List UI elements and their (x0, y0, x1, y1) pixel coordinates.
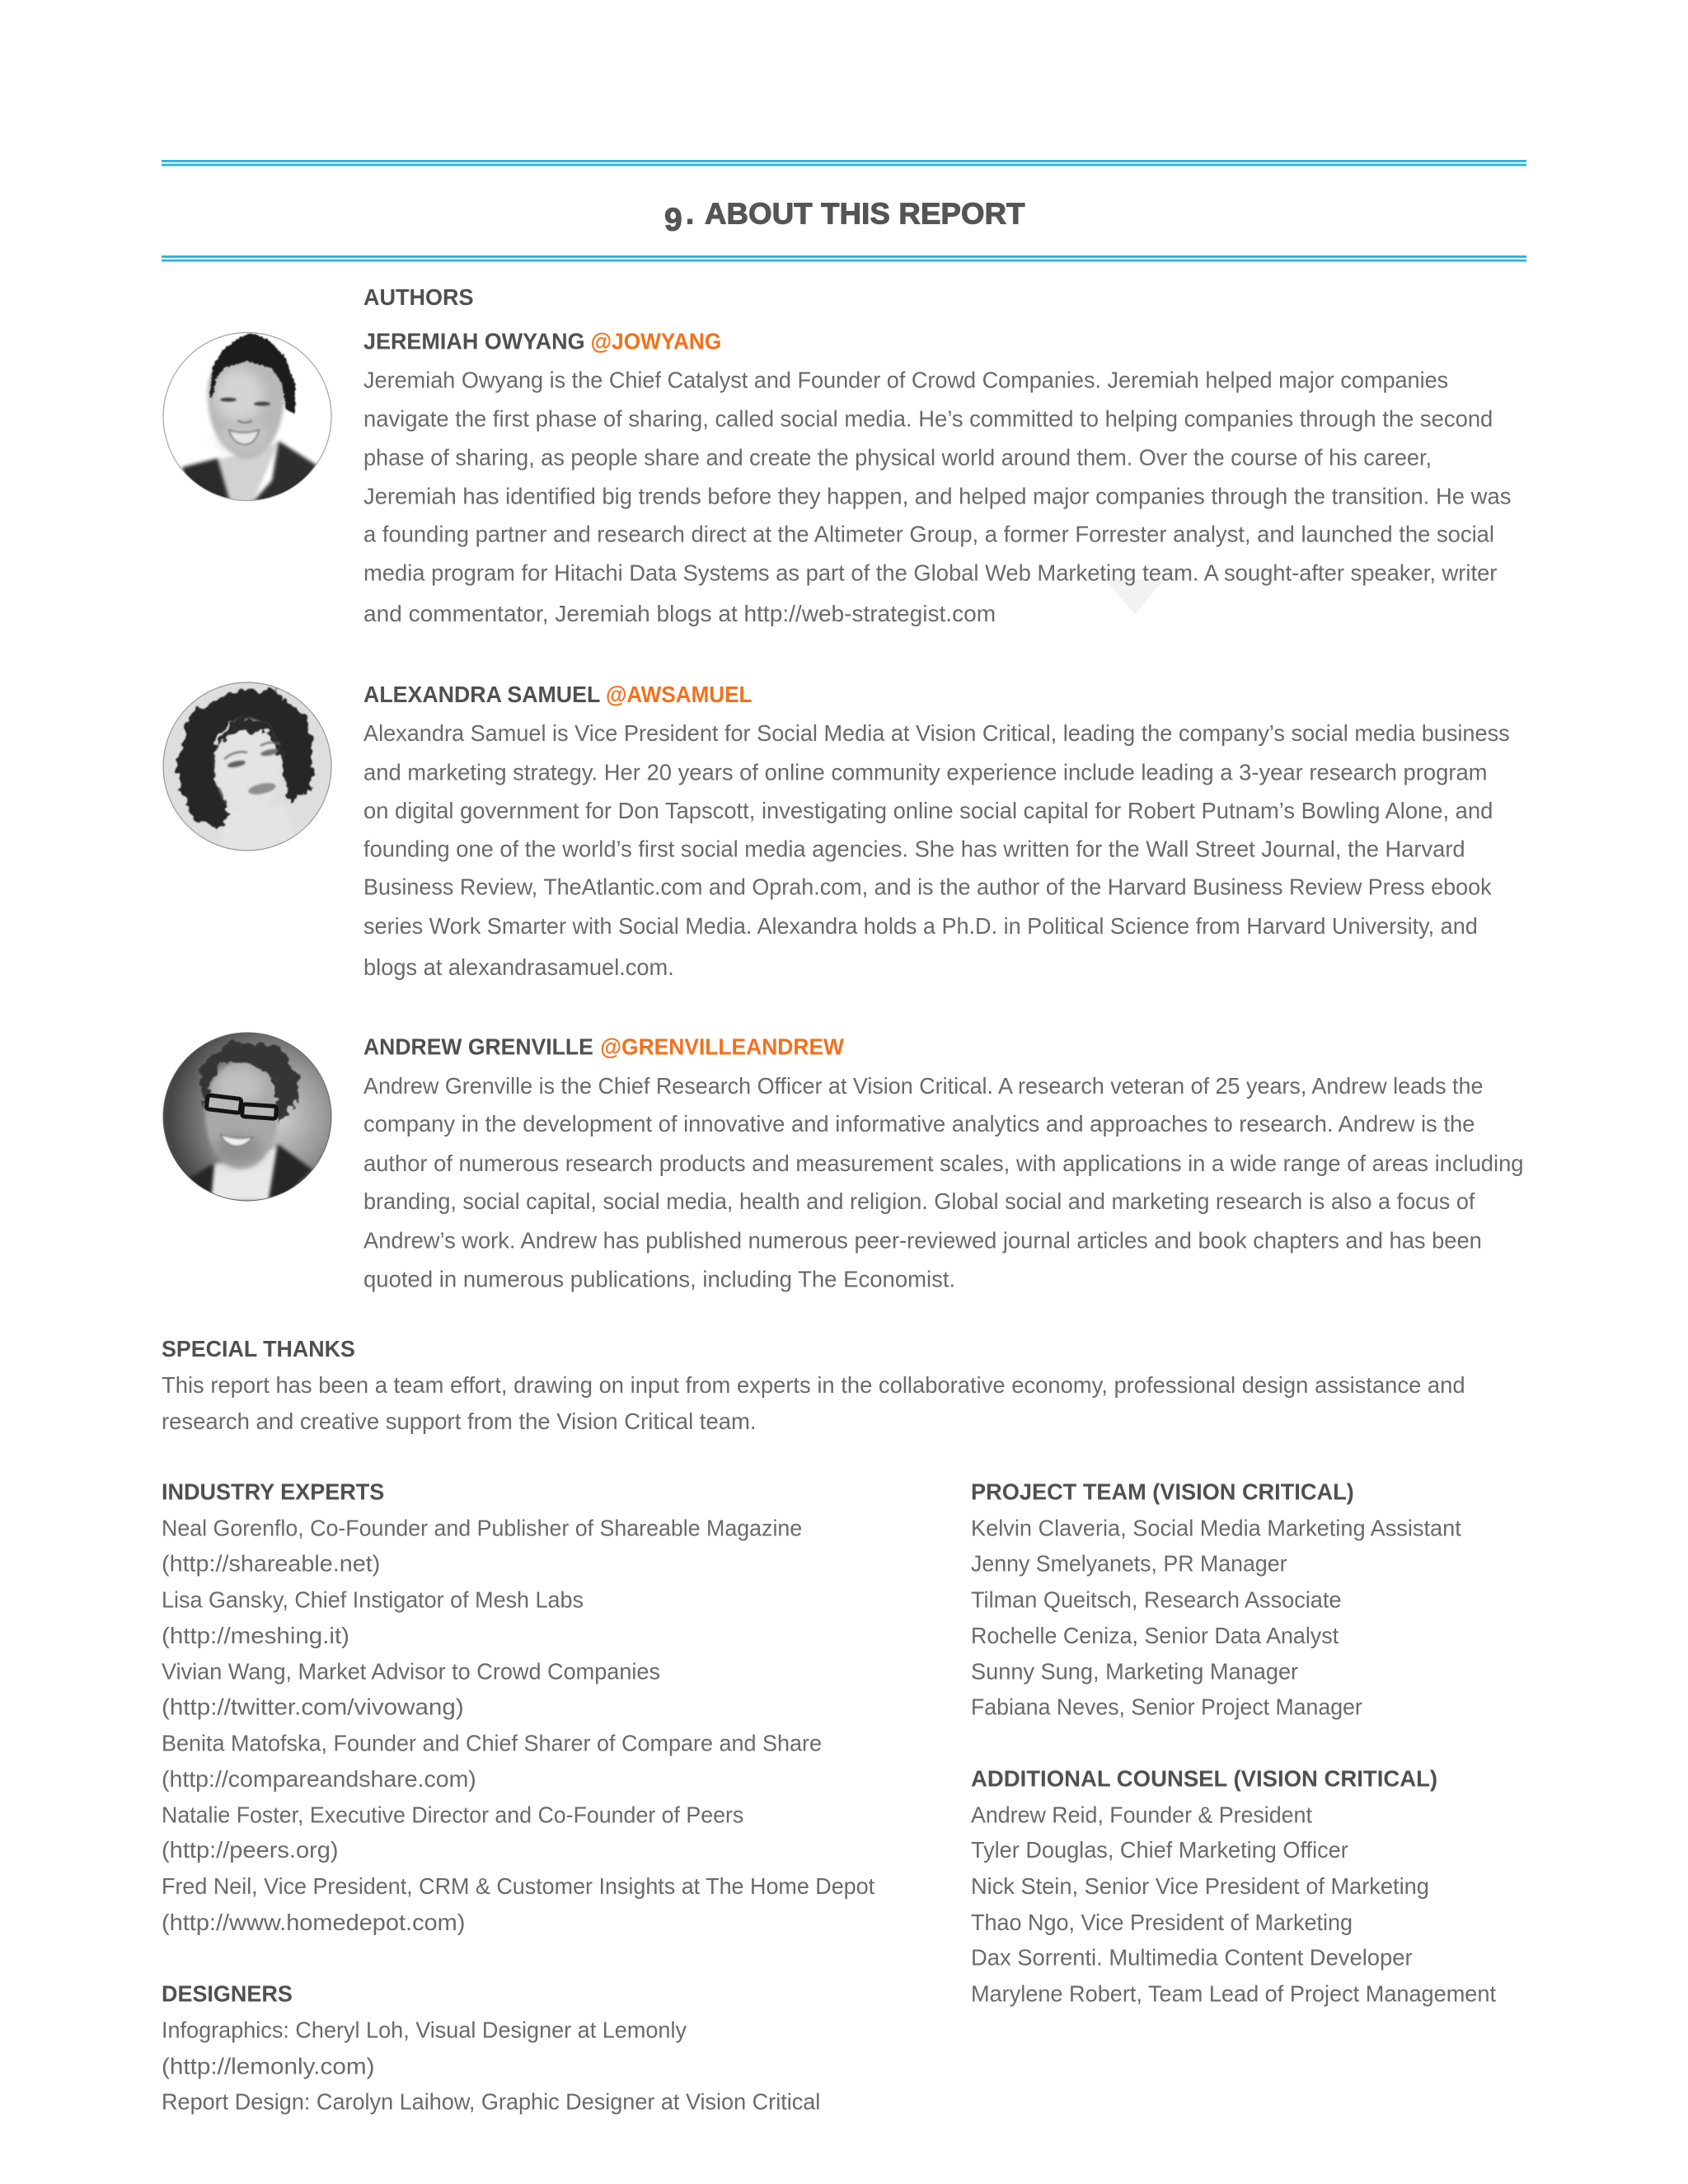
industry experts list: Fred Neil, Vice President, CRM & Customer Insights at The Home Depot (162, 1873, 874, 1899)
biography (363, 1073, 1523, 1292)
name and handle: JEREMIAH OWYANG (363, 328, 585, 354)
portrait: Andrew Grenville (163, 1033, 331, 1201)
industry experts list: Lisa Gansky, Chief Instigator of Mesh Labs (162, 1586, 584, 1612)
designers list (162, 2017, 820, 2114)
designers list: Report Design: Carolyn Laihow, Graphic Designer at Vision Critical (162, 2088, 820, 2114)
project team list: Jenny Smelyanets, PR Manager (971, 1551, 1287, 1576)
special thanks (162, 1336, 1465, 1434)
industry experts list: (http://twitter.com/vivowang) (162, 1694, 464, 1719)
designers list: Infographics: Cheryl Loh, Visual Designer at Lemonly (162, 2017, 687, 2042)
biography: blogs at alexandrasamuel.com. (363, 954, 674, 980)
additional counsel list: Marylene Robert, Team Lead of Project Management (971, 1981, 1496, 2006)
industry experts list: (http://shareable.net) (162, 1551, 380, 1576)
additional counsel list (971, 1802, 1496, 2006)
name and handle (363, 1033, 844, 1060)
biography: founding one of the world’s first social media agencies. She has written for the Wall Street Journal, the Harvard (363, 836, 1465, 862)
portrait: Jeremiah Owyang (163, 333, 331, 504)
industry experts list: Vivian Wang, Market Advisor to Crowd Companies (162, 1658, 660, 1684)
industry experts (162, 1479, 874, 1935)
project team list: Kelvin Claveria, Social Media Marketing Assistant (971, 1515, 1461, 1540)
additional counsel heading: ADDITIONAL COUNSEL (VISION CRITICAL) (971, 1765, 1437, 1792)
name and handle: @AWSAMUEL (606, 682, 752, 707)
project team list (971, 1515, 1461, 1719)
additional counsel list: Thao Ngo, Vice President of Marketing (971, 1910, 1353, 1935)
special thanks text: This report has been a team effort, drawing on input from experts in the collaborative economy, professional design assistance and (162, 1372, 1465, 1398)
industry experts list: Benita Matofska, Founder and Chief Sharer of Compare and Share (162, 1730, 822, 1755)
biography: Andrew Grenville is the Chief Research Officer at Vision Critical. A research veteran of 25 years, Andrew leads the (363, 1073, 1484, 1099)
author: Andrew Grenville (363, 1033, 1523, 1292)
name and handle: @GRENVILLEANDREW (600, 1033, 844, 1060)
biography: quoted in numerous publications, including The Economist. (363, 1267, 955, 1292)
bottom double rule (162, 255, 1526, 262)
portrait: Alexandra Samuel (163, 682, 331, 857)
industry experts list: Natalie Foster, Executive Director and Co-Founder of Peers (162, 1802, 743, 1827)
designers heading: DESIGNERS (162, 1981, 293, 2006)
special thanks heading: SPECIAL THANKS (162, 1336, 355, 1361)
biography: author of numerous research products and measurement scales, with applications in a wide range of areas including (363, 1151, 1523, 1176)
biography: media program for Hitachi Data Systems as part of the Global Web Marketing team. A sought-after speaker, writer (363, 560, 1497, 585)
designers (162, 1981, 820, 2114)
biography: Andrew’s work. Andrew has published numerous peer-reviewed journal articles and book chapters and has been (363, 1227, 1482, 1253)
industry experts list: (http://www.homedepot.com) (162, 1910, 465, 1935)
name and handle: @JOWYANG (590, 328, 721, 354)
biography (363, 720, 1510, 980)
industry experts list: (http://meshing.it) (162, 1623, 349, 1648)
biography: branding, social capital, social media, health and religion. Global social and marketing research is also a focus of (363, 1188, 1475, 1214)
name and handle (363, 328, 721, 354)
project team (971, 1479, 1461, 1719)
header band (162, 160, 1526, 262)
industry experts list: (http://compareandshare.com) (162, 1766, 476, 1792)
additional counsel list: Dax Sorrenti. Multimedia Content Developer (971, 1945, 1413, 1970)
biography (363, 367, 1511, 626)
additional counsel (971, 1765, 1496, 2006)
industry experts list: Neal Gorenflo, Co-Founder and Publisher of Shareable Magazine (162, 1515, 802, 1540)
top double rule (162, 160, 1526, 166)
author: Jeremiah Owyang (363, 328, 1511, 626)
industry experts heading: INDUSTRY EXPERTS (162, 1479, 384, 1504)
biography: series Work Smarter with Social Media. Alexandra holds a Ph.D. in Political Science from Harvard University, and (363, 913, 1478, 939)
title: . (686, 197, 694, 231)
special thanks text (162, 1372, 1465, 1434)
biography: phase of sharing, as people share and create the physical world around them. Over the course of his career, (363, 444, 1432, 470)
additional counsel list: Tyler Douglas, Chief Marketing Officer (971, 1837, 1348, 1863)
biography: and commentator, Jeremiah blogs at http://web-strategist.com (363, 601, 996, 626)
title: ABOUT THIS REPORT (705, 197, 1025, 231)
biography: Jeremiah has identified big trends before they happen, and helped major companies through the transition. He was (363, 483, 1511, 509)
industry experts list: (http://peers.org) (162, 1837, 339, 1863)
biography: navigate the first phase of sharing, called social media. He’s committed to helping companies through the second (363, 405, 1493, 431)
biography: Business Review, TheAtlantic.com and Oprah.com, and is the author of the Harvard Business Review Press ebook (363, 874, 1493, 900)
designers list: (http://lemonly.com) (162, 2053, 374, 2079)
decorative background triangle (1104, 579, 1165, 614)
project team list: Tilman Queitsch, Research Associate (971, 1586, 1342, 1612)
special thanks text: research and creative support from the Vision Critical team. (162, 1408, 757, 1434)
project team list: Rochelle Ceniza, Senior Data Analyst (971, 1623, 1339, 1648)
name and handle: ALEXANDRA SAMUEL (363, 682, 600, 707)
biography: company in the development of innovative and informative analytics and approaches to research. Andrew is the (363, 1111, 1475, 1137)
biography: Jeremiah Owyang is the Chief Catalyst and Founder of Crowd Companies. Jeremiah helped major companies (363, 367, 1448, 392)
project team list: Sunny Sung, Marketing Manager (971, 1658, 1298, 1684)
project team list: Fabiana Neves, Senior Project Manager (971, 1694, 1362, 1719)
biography: Alexandra Samuel is Vice President for Social Media at Vision Critical, leading the company’s social media business (363, 720, 1510, 746)
industry experts list (162, 1515, 874, 1935)
name and handle: ANDREW GRENVILLE (363, 1033, 593, 1060)
biography: on digital government for Don Tapscott, investigating online social capital for Robert Putnam’s Bowling Alone, and (363, 798, 1493, 823)
biography: and marketing strategy. Her 20 years of online community experience include leading a 3-year research program (363, 760, 1487, 785)
project team heading: PROJECT TEAM (VISION CRITICAL) (971, 1479, 1354, 1504)
authors heading: AUTHORS (363, 284, 473, 310)
biography: a founding partner and research direct at the Altimeter Group, a former Forrester analyst, and launched the social (363, 521, 1494, 546)
additional counsel list: Nick Stein, Senior Vice President of Marketing (971, 1873, 1429, 1899)
author: Alexandra Samuel (363, 682, 1510, 980)
additional counsel list: Andrew Reid, Founder & President (971, 1802, 1312, 1827)
title: 9 (664, 203, 682, 238)
name and handle (363, 682, 752, 707)
